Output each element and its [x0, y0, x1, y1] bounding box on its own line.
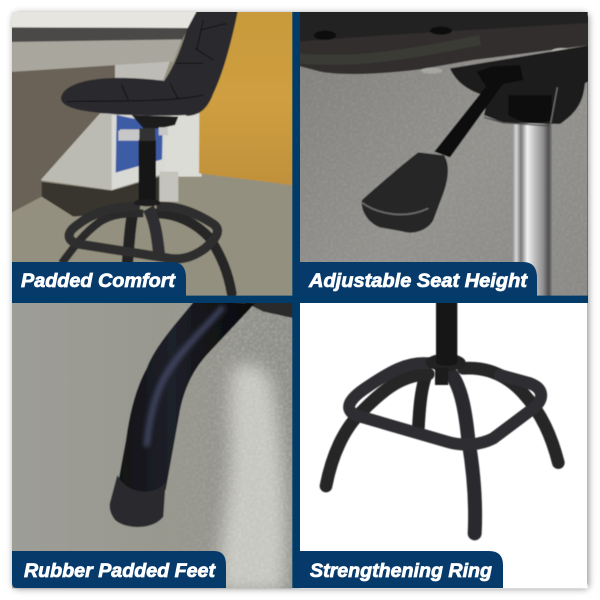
garage floor [10, 300, 294, 592]
chair back [160, 10, 238, 116]
caption: Strengthening Ring [298, 551, 503, 588]
rubber foot cap [110, 475, 166, 527]
post flange [134, 199, 161, 206]
lever paddle [362, 152, 448, 233]
panel: padded comfort photo [10, 10, 294, 298]
floor glare [198, 306, 292, 588]
seat plate [297, 10, 591, 74]
central hub and column [426, 300, 466, 385]
strengthening ring [349, 363, 541, 445]
wall and floor backdrop [10, 10, 294, 298]
front right leg [463, 368, 558, 463]
caption: Padded Comfort [12, 262, 186, 296]
front left leg [326, 374, 428, 486]
desk [10, 27, 188, 213]
front centre leg [452, 375, 475, 533]
textured wall [300, 45, 588, 296]
caption: Adjustable Seat Height [298, 262, 537, 296]
filing cabinet [41, 113, 165, 190]
grey column [159, 172, 178, 202]
caption: Rubber Padded Feet: Rubber Padded Feet [24, 560, 217, 582]
dark gap under cabinet [42, 177, 160, 217]
stool frame and footring [62, 206, 232, 293]
rear leg [418, 378, 425, 428]
panel: strengthening ring product shot [297, 300, 591, 592]
lever arm [434, 77, 504, 157]
height mechanism housing [450, 45, 591, 126]
caption: Strengthening Ring: Strengthening Ring [310, 560, 492, 582]
panel: rubber padded feet photo [10, 300, 294, 592]
chair seat [61, 78, 203, 116]
chrome column [512, 123, 552, 300]
caption: Padded Comfort: Padded Comfort [21, 270, 177, 292]
caption: Adjustable Seat Height: Adjustable Seat Height [308, 270, 529, 292]
panel: adjustable seat height photo [297, 10, 591, 300]
seat post [120, 115, 178, 203]
yellow door [199, 10, 294, 185]
dark object at top edge [244, 303, 292, 318]
bent tube leg [117, 300, 255, 495]
caption: Rubber Padded Feet [12, 551, 226, 588]
